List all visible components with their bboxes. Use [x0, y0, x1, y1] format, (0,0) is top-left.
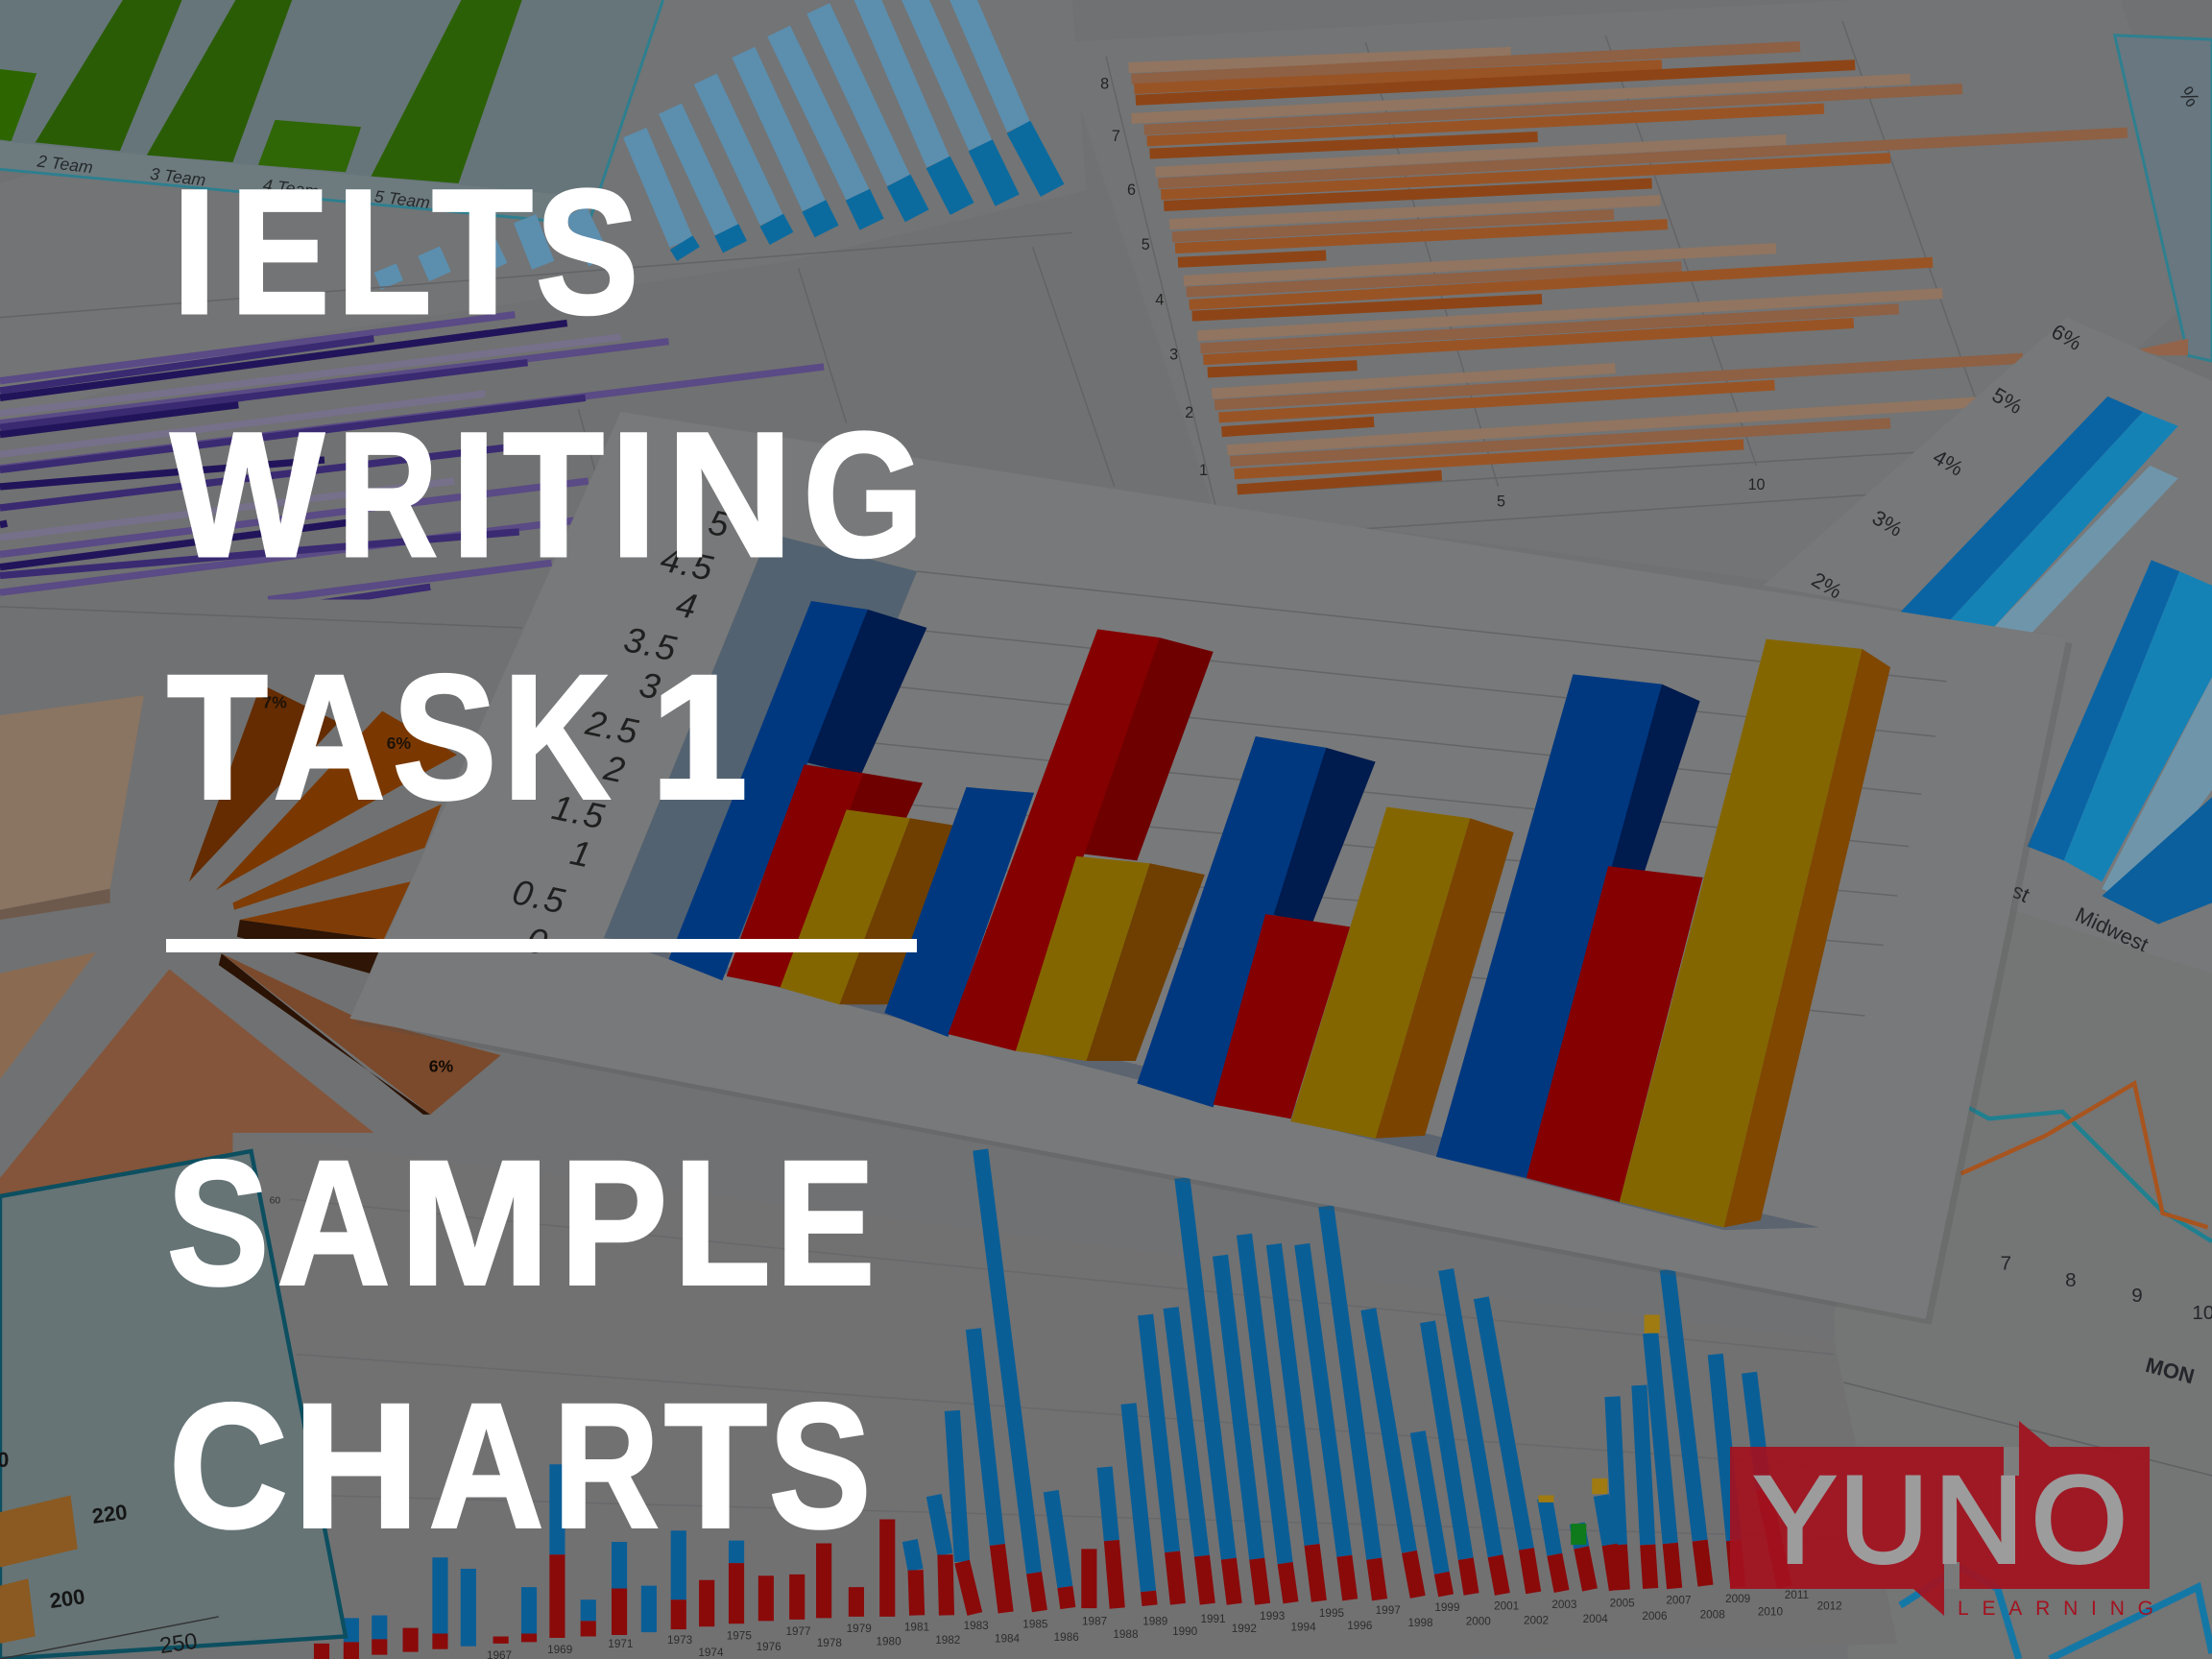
chart: right blue 3D bars on paper: Midwest [2072, 902, 2152, 957]
chart: right blue 3D bars on paper: 3% [1868, 505, 1907, 541]
chart: y axis labels: 1.5 [548, 787, 609, 837]
title line: WRITING: N [666, 397, 793, 594]
chart: right blue 3D bars on paper: 5% [1988, 383, 2027, 419]
chart: lower blue and red yearly bars: 1990 [1172, 1625, 1198, 1638]
chart: lower blue and red yearly bars: 1999 [1434, 1601, 1460, 1614]
chart: lower blue and red yearly bars: 1992 [1232, 1623, 1257, 1635]
chart: lower blue and red yearly bars: 1978 [817, 1637, 842, 1649]
panel: green team bar chart: 4 Team [262, 175, 320, 201]
chart: lower blue and red yearly bars: 1996 [1347, 1620, 1373, 1632]
chart: lower blue and red yearly bars: 1989 [1142, 1616, 1167, 1628]
panel: green team bar chart: 2 Team [36, 151, 94, 177]
chart: lower blue and red yearly bars: 1974 [698, 1647, 724, 1659]
chart: lower blue and red yearly bars: 1971 [608, 1638, 633, 1650]
chart: lower blue and red yearly bars: 2006 [1642, 1610, 1668, 1623]
chart: lower blue and red yearly bars: 2011 [1785, 1589, 1809, 1601]
chart: purple horizontal bars [0, 315, 824, 615]
chart: back wall and floor [604, 533, 1947, 1230]
chart: lower blue and red yearly bars: 1973 [667, 1634, 693, 1647]
chart: orange horizontal bars: 3 [1169, 347, 1178, 364]
subtitle line: CHARTS: C [169, 1367, 288, 1565]
subtitle line: SAMPLE: S [167, 1125, 269, 1323]
chart: orange horizontal bars: 6 [1127, 181, 1136, 199]
chart: lower blue and red yearly bars: 1988 [1113, 1628, 1139, 1641]
title line: TASK 1: A [273, 639, 386, 837]
chart: y axis labels: 1 [567, 832, 595, 876]
chart: lower blue and red yearly bars: 1985 [1022, 1619, 1048, 1631]
paper: central 3D bar chart sheet [349, 412, 2073, 1325]
title divider rule [166, 939, 917, 952]
chart: orange horizontal bars: 10 [1748, 476, 1766, 493]
chart: lower blue and red yearly bars: 1991 [1200, 1613, 1226, 1625]
title line: TASK 1: 1 [651, 639, 748, 837]
chart: lower blue and red yearly bars: 1984 [995, 1632, 1021, 1645]
subtitle line: CHARTS: T [664, 1367, 767, 1565]
logo: YUNO Learning: YUNO [1754, 1452, 2128, 1589]
title line: IELTS: T [432, 154, 533, 351]
panel: green team bar chart: 5 Team [373, 186, 431, 212]
chart: orange horizontal bars: 2 [1185, 404, 1193, 421]
chart: lower blue and red yearly bars: 2005 [1610, 1598, 1635, 1610]
title line: TASK 1: S [393, 639, 496, 837]
title line: IELTS: L [337, 154, 432, 351]
chart: lower blue and red yearly bars: 1969 [547, 1644, 572, 1656]
chart: y axis labels [509, 502, 733, 963]
chart: orange horizontal bars: 7 [1112, 128, 1120, 145]
chart: orange horizontal bars: 8 [1100, 76, 1109, 93]
title line: IELTS: S [536, 154, 638, 351]
title: IELTS Writing Task 1 [167, 154, 924, 837]
chart: pie wedges: 6% [429, 1057, 453, 1076]
chart: lower blue and red yearly bars: 1975 [727, 1629, 752, 1642]
chart: lower blue and red yearly bars: 1980 [876, 1635, 902, 1647]
chart: group 2 bars [884, 629, 1214, 1061]
chart: right blue 3D bars on paper: 2% [1808, 567, 1846, 604]
chart: y axis labels: 2.5 [582, 703, 642, 752]
title line: WRITING: T [503, 397, 604, 594]
chart: lower blue and red yearly bars: 1976 [757, 1641, 781, 1653]
chart: y axis labels: 4.5 [658, 539, 717, 589]
chart: lower blue and red yearly bars: 2010 [1758, 1605, 1783, 1618]
chart: y axis labels: 4 [673, 584, 702, 627]
chart: lower blue and red yearly bars: 1993 [1260, 1610, 1286, 1623]
paper: orange chart page [1058, 0, 2212, 592]
chart: pie wedges: 6% [387, 733, 411, 753]
chart: y axis labels: 2 [600, 748, 630, 790]
chart: lower blue and red yearly bars: 2001 [1494, 1600, 1519, 1613]
chart: pie wedges [0, 685, 501, 1199]
chart: orange horizontal bars: 1 [1199, 462, 1208, 479]
panel: lower left teal chart: 250 [158, 1628, 199, 1658]
chart: light blue stepped bars [385, 0, 1052, 285]
chart: lower blue and red yearly bars [232, 1133, 1897, 1659]
paper: right line chart: 7 [2001, 1252, 2011, 1274]
subtitle line: SAMPLE: M [399, 1125, 550, 1323]
subtitle line: SAMPLE: P [560, 1125, 667, 1323]
title line: IELTS: I [172, 154, 217, 351]
chart: orange horizontal bars: 5 [1497, 493, 1505, 511]
chart: group 3 bars [1137, 736, 1514, 1139]
panel: top right teal page: % [2175, 83, 2204, 111]
chart: right blue 3D bars on paper: 4% [1929, 445, 1967, 481]
chart: group 1 bars [668, 601, 953, 1004]
paper: right line chart: MON [2143, 1353, 2197, 1388]
subtitle line: SAMPLE: E [776, 1125, 875, 1323]
paper: right line chart: 8 [2065, 1269, 2077, 1291]
panel: top right teal page [2115, 36, 2212, 361]
chart: lower blue and red yearly bars: 1983 [964, 1620, 989, 1632]
chart: lower blue and red yearly bars: 2012 [1817, 1600, 1842, 1613]
title line: WRITING: G [803, 397, 924, 594]
chart: lower blue and red yearly bars: 2000 [1466, 1616, 1491, 1628]
chart: lower blue and red yearly bars: 1979 [847, 1623, 872, 1635]
title line: WRITING: I [451, 397, 496, 594]
title line: WRITING: I [611, 397, 657, 594]
chart: right blue 3D bars on paper: 6% [2048, 319, 2086, 355]
chart: lower blue and red yearly bars: 2007 [1666, 1595, 1691, 1607]
chart: lower blue and red yearly bars: 60 [270, 1195, 280, 1206]
panel: lower left teal chart [0, 1151, 346, 1659]
paper: right line chart [1834, 902, 2212, 1659]
paper: top centre blue chart page [0, 0, 1086, 423]
chart: lower blue and red yearly bars: 1982 [935, 1634, 960, 1647]
chart: orange horizontal bars: 5 [1142, 236, 1150, 253]
chart: lower blue and red yearly bars: 1995 [1319, 1607, 1344, 1620]
title line: TASK 1: K [503, 639, 611, 837]
subtitle line: CHARTS: R [553, 1367, 659, 1565]
chart: y axis labels: 3 [637, 664, 664, 708]
chart: lower blue and red yearly bars: 2009 [1725, 1593, 1750, 1605]
chart: lower blue and red yearly bars: 1977 [785, 1625, 811, 1638]
chart: lower blue and red yearly bars: 1987 [1082, 1616, 1107, 1628]
chart: right blue 3D bars on paper: st [2008, 878, 2033, 907]
chart: y axis labels: 0.5 [509, 872, 569, 922]
chart: lower blue and red yearly bars: 2004 [1583, 1613, 1608, 1625]
panel: lower left teal chart: 200 [48, 1584, 86, 1613]
chart: y axis labels: 5 [706, 502, 733, 545]
chart: lower blue and red yearly bars: 1986 [1054, 1631, 1079, 1644]
chart: lower blue and red yearly bars: 1997 [1376, 1604, 1401, 1617]
paper: right line chart: 9 [2131, 1285, 2143, 1307]
chart: lower blue and red yearly bars: 2002 [1524, 1614, 1549, 1626]
chart: lower blue and red yearly bars: 2008 [1700, 1608, 1725, 1621]
chart: y axis labels: 3.5 [620, 619, 681, 669]
logo: YUNO Learning [1730, 1421, 2153, 1620]
chart: lower blue and red yearly bars: 1994 [1290, 1622, 1316, 1634]
chart: pie wedges: 7% [262, 693, 287, 712]
panel: green team bar chart [0, 0, 663, 225]
panel: green team bar chart: 3 Team [149, 164, 206, 190]
subtitle line: SAMPLE: L [673, 1125, 771, 1323]
chart: orange horizontal bars: 4 [1155, 291, 1164, 308]
subtitle line: CHARTS: A [428, 1367, 543, 1565]
chart: group 4 bars [1436, 639, 1890, 1227]
chart: lower blue and red yearly bars: 1981 [904, 1622, 929, 1634]
subtitle line: SAMPLE: A [276, 1125, 390, 1323]
chart: right blue 3D bars on paper [1764, 318, 2212, 1016]
title line: IELTS: E [230, 154, 329, 351]
title line: TASK 1: T [167, 639, 268, 837]
subtitle line: CHARTS: H [293, 1367, 420, 1565]
subtitle line: CHARTS: S [769, 1367, 871, 1565]
chart: orange horizontal bars [1100, 21, 2128, 529]
title line: WRITING: R [338, 397, 438, 594]
paper: purple bar chart page lines [0, 232, 1115, 628]
chart: lower blue and red yearly bars: 2003 [1551, 1599, 1577, 1611]
subtitle: Sample Charts [167, 1125, 875, 1565]
panel: lower left teal chart: 220 [90, 1500, 129, 1528]
title line: WRITING: W [171, 397, 325, 594]
chart: lower blue and red yearly bars: 1998 [1407, 1617, 1433, 1629]
chart: y axis labels: 0 [523, 920, 552, 963]
logo: YUNO Learning: LEARNING [1958, 1598, 2153, 1620]
